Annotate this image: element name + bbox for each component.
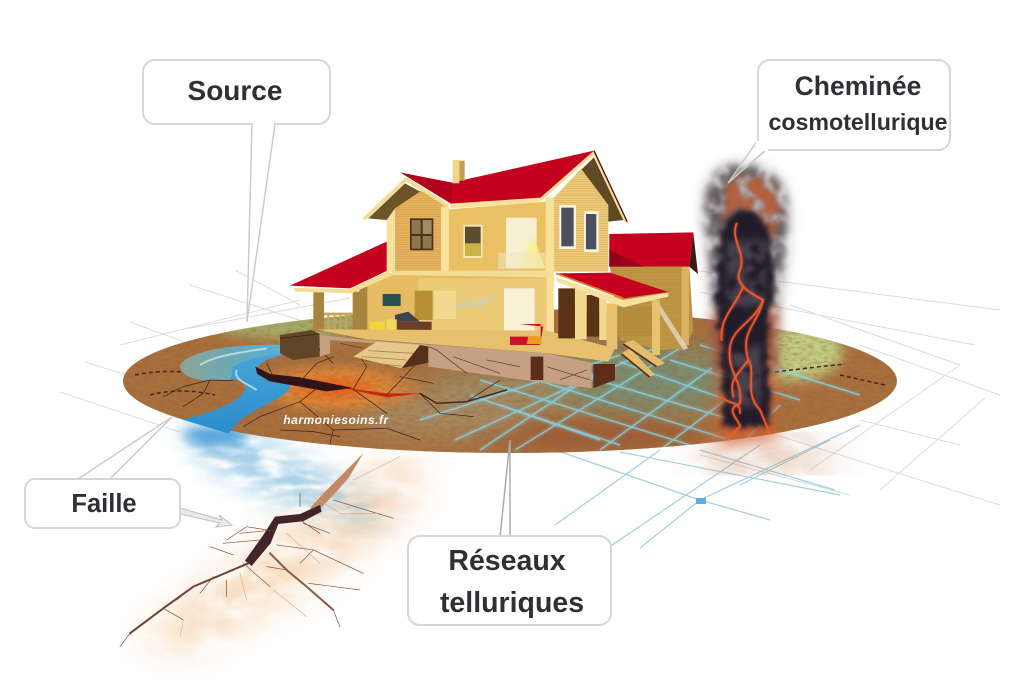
tornado: cosmotelluric chimney (705, 165, 787, 447)
right gable underside (582, 157, 623, 222)
stairs left (353, 342, 428, 368)
balcony lamp glow (518, 235, 545, 268)
upper door (506, 218, 537, 268)
callout: Faille: Faille (71, 490, 137, 518)
callout: Réseaux telluriques: telluriques (440, 587, 584, 619)
windows right (559, 205, 599, 252)
right porch (558, 288, 599, 338)
callout: Faille (25, 417, 232, 528)
blue telluric grid beyond the disk (555, 425, 860, 560)
house (280, 151, 698, 388)
green patch left (216, 316, 361, 346)
wing walls (610, 267, 693, 350)
footprint dashes (135, 364, 885, 395)
armchair (510, 324, 543, 345)
perspective ground grid (60, 270, 1000, 505)
bed (370, 312, 432, 333)
grid node marker (696, 498, 706, 504)
lower left roof (290, 242, 387, 288)
window middle (463, 225, 483, 258)
smoke core (717, 211, 773, 427)
slab (392, 271, 555, 277)
disk cracks (163, 343, 507, 443)
right stairs (622, 340, 665, 377)
wall fixture (455, 295, 497, 308)
wing roof (609, 232, 693, 267)
disk: ground cross-section (120, 304, 910, 457)
orange haze (723, 176, 780, 240)
lower fault crack (120, 453, 400, 647)
callout: Source: Source (188, 75, 282, 106)
green patch right (768, 328, 850, 390)
picture (383, 294, 401, 306)
callout: Source (143, 60, 330, 322)
light beam (660, 305, 688, 350)
ground door (504, 288, 535, 333)
gable trim (540, 153, 626, 222)
lightning (720, 223, 770, 440)
callout: Réseaux telluriques (408, 440, 611, 625)
window upper left (410, 218, 433, 250)
main roof (401, 151, 594, 204)
callout: Réseaux telluriques: Réseaux (448, 545, 566, 577)
utility box (280, 330, 319, 360)
smoke halo (705, 165, 787, 373)
chimney (453, 160, 465, 183)
left gable underside (368, 183, 445, 220)
eave trim (450, 200, 540, 206)
splatter beneath tornado (695, 440, 834, 467)
columns (387, 197, 554, 342)
upper floor walls (395, 190, 448, 272)
watermark: harmoniesoins.fr (283, 413, 390, 427)
callout: Cheminée cosmotellurique: Cheminée (795, 71, 921, 101)
foundation (320, 335, 592, 388)
left porch posts (313, 282, 367, 333)
callout: Cheminée cosmotellurique (728, 60, 950, 183)
callout: Cheminée cosmotellurique: cosmotellurique (768, 109, 948, 135)
floor deck (317, 329, 615, 362)
wash: water seeping under the disk (183, 424, 390, 525)
river (180, 345, 295, 433)
orange spot (267, 362, 424, 414)
doorway (415, 291, 433, 320)
lower floor walls (366, 275, 547, 337)
porch roof (556, 273, 668, 298)
wash: orange fault staining (135, 455, 430, 650)
green zone under house (540, 346, 760, 414)
telluric grid on disk (420, 345, 860, 455)
